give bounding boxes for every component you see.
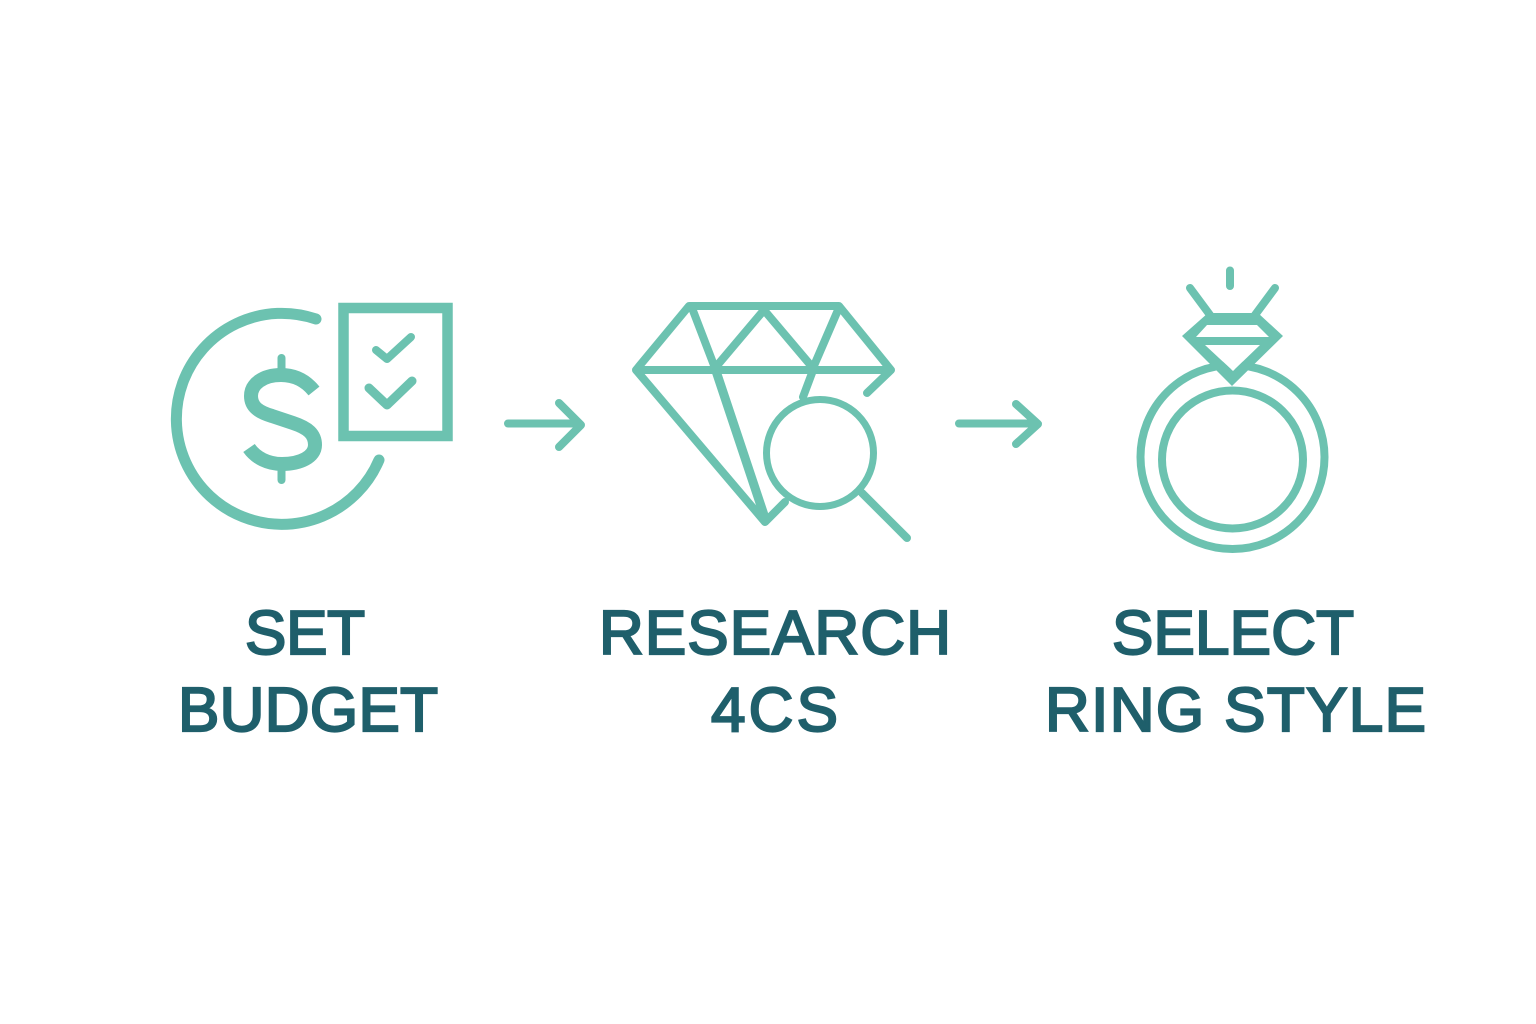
label: set budget: BUDGET [178,676,438,745]
label: set budget [178,599,438,745]
checklist card [344,308,448,436]
gemstone [1182,313,1283,386]
dollar sign [249,358,315,480]
magnifier lens [766,400,874,506]
check mark bottom [369,381,412,405]
coin outline [176,313,379,524]
sparkle lines [1190,270,1275,315]
icon: engagement ring [1140,270,1324,549]
check mark top [376,337,411,359]
label: research 4cs: RESEARCH [599,599,951,668]
label: research 4cs: 4CS [711,676,838,745]
label: research 4cs [599,599,951,745]
label: select ring style: SELECT [1112,599,1354,668]
magnifier handle [862,493,907,538]
diamond pavilion facet [716,371,765,518]
label: select ring style: RING STYLE [1045,676,1426,745]
diamond outline and facets [636,306,891,522]
ring inner band [1162,390,1303,528]
ring outer band [1140,365,1324,549]
label: set budget: SET [245,599,365,668]
arrow: research to ring [959,404,1038,444]
arrow: budget to research [508,403,581,447]
icon: budget coin and checklist [176,308,448,524]
icon: diamond with magnifier [636,306,907,538]
label: select ring style [1045,599,1426,745]
